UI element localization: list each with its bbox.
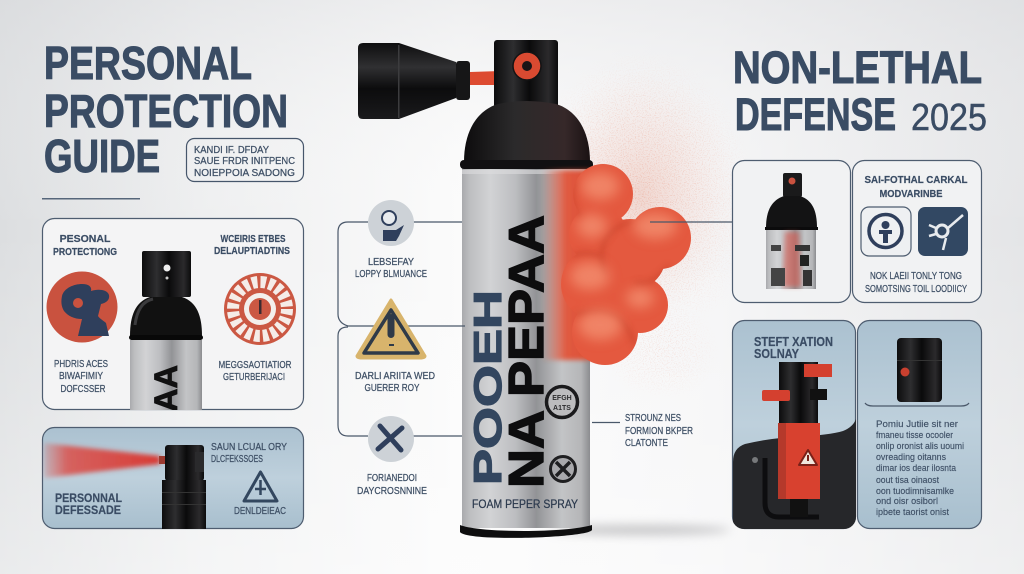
icon: warning triangle	[244, 472, 277, 501]
label: foam peper spray: FOAM PEPER SPRAY	[472, 497, 578, 511]
label	[754, 335, 833, 361]
body	[462, 168, 590, 528]
callout: foam formula: CLATONTE	[625, 438, 668, 449]
pepper mist cloud	[568, 70, 734, 388]
label: personal defessade	[55, 491, 122, 517]
ground shadow	[550, 525, 730, 535]
label: bottom left: BIWAFIMIY	[59, 370, 103, 382]
icon: person in red circle	[46, 272, 118, 342]
panel: can product	[732, 160, 850, 302]
label: spray defense: DLCFEKSSOES	[211, 454, 263, 465]
label: paragraph: ovreading oitanns	[876, 452, 946, 463]
label: personal protecting	[53, 233, 117, 258]
label: SOLNAY	[754, 347, 800, 361]
badge: round seal: A1TS	[553, 405, 571, 412]
panel: step action	[732, 320, 856, 529]
label: MODVARINBE	[880, 188, 942, 200]
panel: personal defense spray	[42, 428, 304, 530]
dome	[464, 101, 590, 162]
label: paragraph: Pomiu Jutiie sit ner	[876, 419, 958, 430]
subtitle tag	[186, 138, 304, 182]
label: brand lines: NA PEPAA	[500, 215, 554, 488]
label: paragraph: fmaneu tisse ocooler	[876, 430, 953, 441]
callout: foam formula: STROUNZ NES	[625, 413, 681, 424]
label: personal protecting: PROTECTIONG	[53, 246, 117, 258]
label	[865, 270, 967, 295]
label	[357, 472, 427, 497]
heading: Personal Protection Guide: PERSONAL	[44, 37, 252, 89]
icon: pressure wheel	[224, 273, 296, 345]
spray can in panel	[129, 251, 203, 412]
callout: foam formula	[592, 413, 693, 449]
lobe shading	[572, 180, 669, 345]
label: paragraph: ipbete taorist onist	[876, 507, 949, 518]
base ring	[460, 525, 592, 538]
heading: Non-Lethal Defense 2025: NON-LETHAL	[733, 42, 982, 93]
spray can in panel: AA	[148, 365, 184, 412]
label: paragraph: oon tuodimnisamlke	[876, 486, 954, 497]
label: brand lines: POOEH	[467, 290, 510, 485]
label: FORIANEDOI	[367, 472, 417, 484]
mini device	[897, 338, 942, 402]
label: DAYCROSNNINE	[357, 485, 427, 497]
label: personal protecting: PESONAL	[60, 233, 111, 245]
subtitle tag: SAUE FRDR INITPENC	[194, 156, 295, 167]
label: spray defense	[211, 442, 287, 465]
callout: crossed-out icon and connector	[338, 327, 462, 497]
icon: crossed tool	[368, 416, 414, 462]
label: bottom right: GETURBERIJACI	[223, 371, 285, 383]
red spray cone	[44, 443, 160, 478]
label	[864, 174, 968, 200]
label: bottom left: DOFCSSER	[60, 383, 106, 395]
heading: Personal Protection Guide: GUIDE	[44, 130, 160, 182]
panel: instructions	[858, 320, 982, 528]
heading: Non-Lethal Defense 2025: DEFENSE	[735, 89, 896, 140]
compact spray device	[159, 445, 206, 530]
badge: round seal	[546, 386, 578, 418]
heading: Non-Lethal Defense 2025	[733, 42, 987, 140]
callout: warning triangle	[355, 300, 435, 394]
panel: personal protecting	[42, 218, 304, 412]
label: paragraph: dimar ios dear ilosnta	[876, 463, 957, 474]
collar	[460, 160, 593, 169]
label: paragraph: onlip oronist alis uoumi	[876, 441, 964, 452]
label: denldeieac: DENLDEIEAC	[234, 505, 286, 517]
label: STEFT XATION	[754, 335, 833, 349]
nozzle tube	[358, 43, 501, 119]
heading: Personal Protection Guide: PROTECTION	[44, 85, 288, 137]
badge: round seal: EFGH	[552, 395, 572, 402]
label	[355, 256, 427, 280]
safety device	[762, 362, 832, 517]
callout: lessefay icon and connector	[338, 200, 465, 326]
label: GUERER ROY	[364, 382, 420, 394]
heading: Non-Lethal Defense 2025: 2025	[911, 97, 987, 139]
badge: crossed tools	[550, 456, 576, 482]
label: bottom left: PHDRIS ACES	[54, 358, 108, 370]
heading: Personal Protection Guide	[44, 37, 288, 182]
label: SAI-FOTHAL CARKAL	[864, 174, 968, 186]
label: personal defessade: DEFESSADE	[55, 503, 121, 517]
subtitle tag: NOIEPPOIA SADONG	[194, 168, 295, 179]
dark holster	[733, 419, 856, 529]
main foam pepper spray can	[358, 40, 730, 538]
label: paragraph: ond oisr osiborl	[876, 496, 938, 507]
label: DARLI ARIITA WED	[355, 370, 435, 382]
red bleed on can	[542, 170, 590, 360]
icon: burst badge	[918, 207, 968, 256]
label	[355, 370, 435, 394]
label: bottom right	[218, 359, 292, 383]
label: NOK LAEII TONLY TONG	[870, 270, 962, 282]
label: brand lines	[467, 215, 554, 488]
cap neck	[494, 40, 558, 108]
label: bottom right: MEGGSAOTIATIOR	[218, 359, 292, 371]
callout: foam formula: FORMION BKPER	[625, 426, 693, 437]
label: spray defense: SAUN LCUAL ORY	[211, 442, 287, 453]
icon: person	[368, 200, 414, 246]
label: paragraph: oout tisa oinaost	[876, 475, 939, 486]
icon: person badge	[861, 207, 911, 256]
label: bottom left	[54, 358, 108, 395]
label: personal defessade: PERSONNAL	[55, 491, 122, 505]
panel: safety icons	[852, 160, 982, 302]
label: paragraph	[876, 419, 964, 518]
label: top right: DELAUPTIADTINS	[214, 245, 290, 257]
label: LEBSEFAY	[368, 256, 414, 268]
foam blob	[561, 164, 691, 365]
label: SOMOTSING TOIL LOODIICY	[865, 283, 967, 295]
mini can	[765, 173, 818, 289]
label: top right: WCEIRIS ETBES	[220, 233, 286, 245]
label: LOPPY BLMUANCE	[355, 268, 427, 280]
subtitle tag: KANDI IF. DFDAY	[194, 145, 269, 156]
label: top right	[214, 233, 290, 257]
